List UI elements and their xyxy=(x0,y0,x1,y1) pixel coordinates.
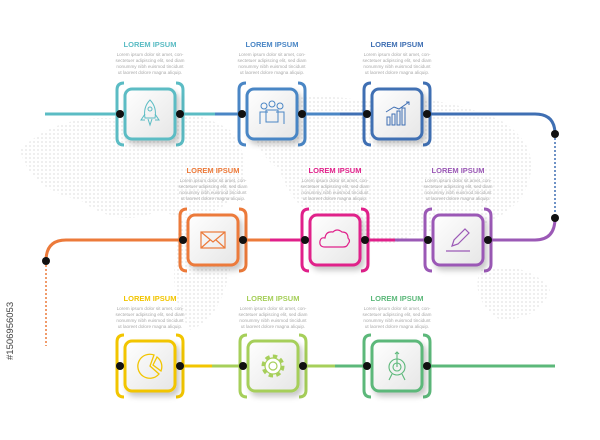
step 5: cloud: Lorem ipsum dolor sit amet, con- xyxy=(302,178,369,183)
step 4: mail: nonummy nibh euismod tincidunt xyxy=(179,190,247,195)
path end dots xyxy=(42,130,559,265)
step 1: rocket: nonummy nibh euismod tincidunt xyxy=(116,64,184,69)
step 4: mail: sectetuer adipiscing elit, sed diam xyxy=(179,184,248,189)
step 4: mail: Lorem ipsum dolor sit amet, con- xyxy=(180,178,247,183)
step 7: pie chart xyxy=(116,294,185,397)
step 2: team: LOREM IPSUM xyxy=(246,40,298,49)
icon: rocket xyxy=(141,100,159,125)
connector path xyxy=(45,114,555,366)
step 2: team: Lorem ipsum dolor sit amet, con- xyxy=(239,52,306,57)
step 4: mail xyxy=(179,166,248,271)
icon: bar chart xyxy=(386,102,409,125)
step 8: gear xyxy=(239,294,308,397)
icon: envelope xyxy=(201,232,225,248)
step 6: pencil xyxy=(424,166,493,271)
step 3: chart: sectetuer adipiscing elit, sed diam xyxy=(363,58,432,63)
step 3: chart: nonummy nibh euismod tincidunt xyxy=(363,64,431,69)
step 7: pie chart: LOREM IPSUM xyxy=(124,294,176,303)
step 3: chart: ut laoreet dolore magna aliquip. xyxy=(365,70,429,75)
step 8: gear: LOREM IPSUM xyxy=(247,294,299,303)
step 2: team: ut laoreet dolore magna aliquip. xyxy=(240,70,304,75)
step 9: target: LOREM IPSUM xyxy=(371,294,423,303)
step 6: pencil: Lorem ipsum dolor sit amet, con- xyxy=(425,178,492,183)
step 6: pencil: nonummy nibh euismod tincidunt xyxy=(424,190,492,195)
step 5: cloud: LOREM IPSUM xyxy=(309,166,361,175)
icon: pencil xyxy=(446,229,470,251)
step 9: target: nonummy nibh euismod tincidunt xyxy=(363,318,431,323)
step 1: rocket: Lorem ipsum dolor sit amet, con- xyxy=(117,52,184,57)
step 3: chart: LOREM IPSUM xyxy=(371,40,423,49)
step 7: pie chart: ut laoreet dolore magna aliquip. xyxy=(118,324,182,329)
icon: gear xyxy=(264,357,282,375)
step 4: mail: LOREM IPSUM xyxy=(187,166,239,175)
stock id vertical text: #1506956053 xyxy=(5,302,16,360)
step 2: team xyxy=(238,40,307,145)
step 8: gear: ut laoreet dolore magna aliquip. xyxy=(241,324,305,329)
step 7: pie chart: nonummy nibh euismod tincidunt xyxy=(116,318,184,323)
step 9: target: ut laoreet dolore magna aliquip. xyxy=(365,324,429,329)
icon: pie chart xyxy=(138,354,162,378)
step 5: cloud: ut laoreet dolore magna aliquip. xyxy=(303,196,367,201)
step 9: target: Lorem ipsum dolor sit amet, con- xyxy=(364,306,431,311)
step 1: rocket: LOREM IPSUM xyxy=(124,40,176,49)
step 1: rocket xyxy=(116,40,185,145)
step 2: team: nonummy nibh euismod tincidunt xyxy=(238,64,306,69)
step 7: pie chart: Lorem ipsum dolor sit amet, con- xyxy=(117,306,184,311)
background world map dots (decorative) xyxy=(20,97,550,330)
step 3: chart: Lorem ipsum dolor sit amet, con- xyxy=(364,52,431,57)
icon: cloud xyxy=(320,230,350,247)
step 5: cloud: sectetuer adipiscing elit, sed diam xyxy=(301,184,370,189)
step 2: team: sectetuer adipiscing elit, sed diam xyxy=(238,58,307,63)
step 8: gear: Lorem ipsum dolor sit amet, con- xyxy=(240,306,307,311)
step 5: cloud: nonummy nibh euismod tincidunt xyxy=(301,190,369,195)
step 4: mail: ut laoreet dolore magna aliquip. xyxy=(181,196,245,201)
step 9: target: sectetuer adipiscing elit, sed diam xyxy=(363,312,432,317)
step 8: gear: sectetuer adipiscing elit, sed diam xyxy=(239,312,308,317)
step 1: rocket: ut laoreet dolore magna aliquip. xyxy=(118,70,182,75)
step 1: rocket: sectetuer adipiscing elit, sed diam xyxy=(116,58,185,63)
step 7: pie chart: sectetuer adipiscing elit, sed diam xyxy=(116,312,185,317)
step 6: pencil: LOREM IPSUM xyxy=(432,166,484,175)
step 3: chart xyxy=(363,40,432,145)
icon: target xyxy=(389,352,405,380)
step 8: gear: nonummy nibh euismod tincidunt xyxy=(239,318,307,323)
step 6: pencil: sectetuer adipiscing elit, sed diam xyxy=(424,184,493,189)
icon: team xyxy=(260,101,284,124)
step 9: target xyxy=(363,294,432,397)
step 6: pencil: ut laoreet dolore magna aliquip. xyxy=(426,196,490,201)
step 5: cloud xyxy=(301,166,370,271)
